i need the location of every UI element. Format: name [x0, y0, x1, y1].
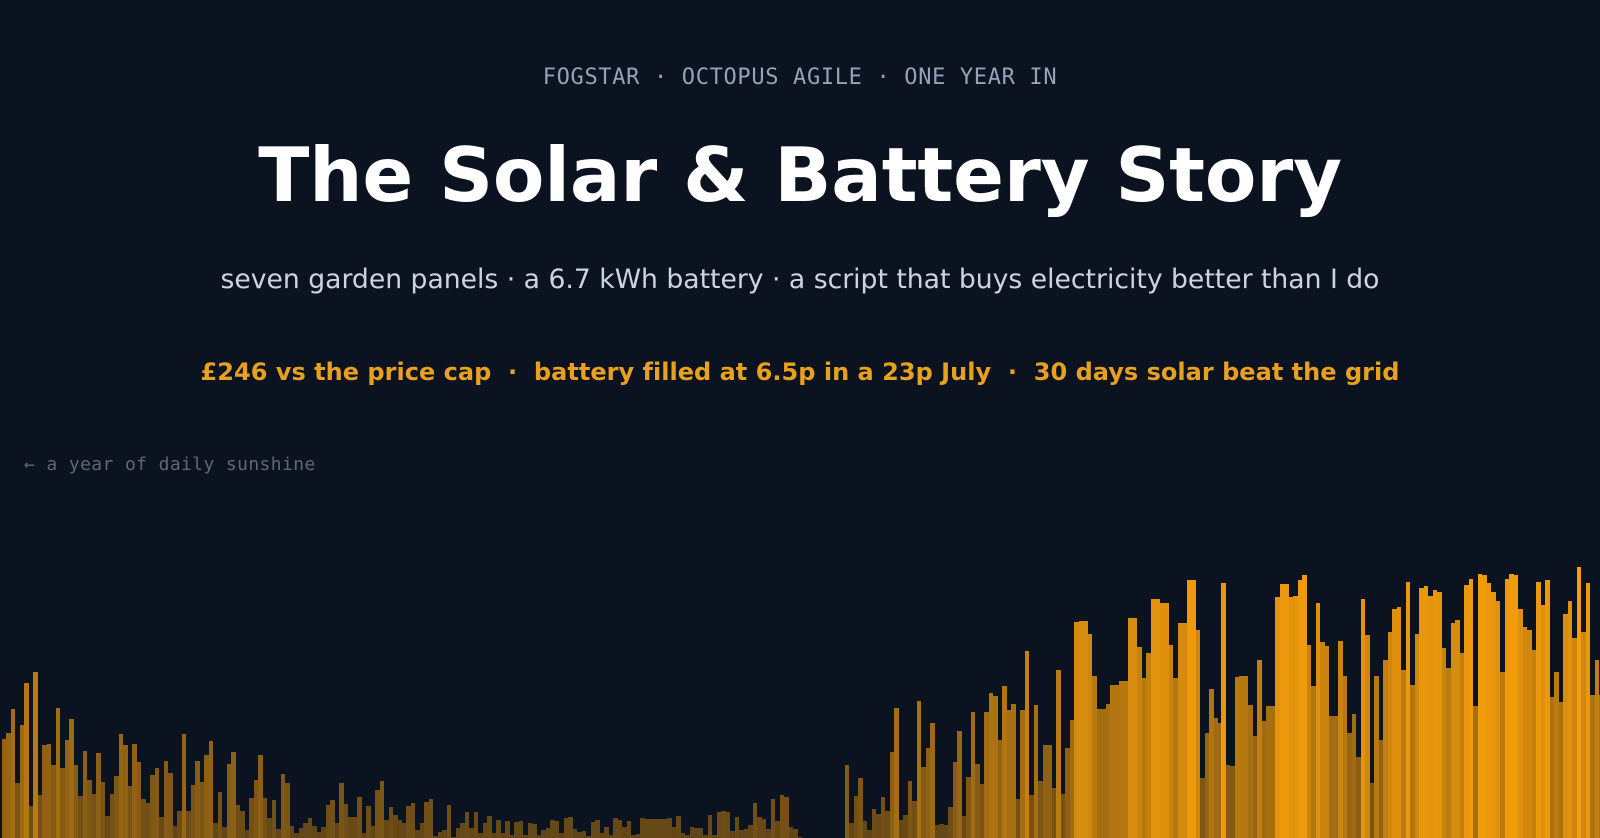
subtitle: seven garden panels · a 6.7 kWh battery · a script that buys electricity better than I do: [221, 264, 1379, 295]
kicker label: FOGSTAR · OCTOPUS AGILE · ONE YEAR IN: [543, 65, 1057, 90]
bar chart: a year of daily sunshine: [2, 567, 1600, 838]
title: The Solar & Battery Story: [258, 131, 1342, 219]
key stats line: £246 vs the price cap · battery filled at 6.5p in a 23p July · 30 days solar beat the grid: [201, 358, 1399, 386]
chart note: ← a year of daily sunshine: [24, 454, 316, 475]
